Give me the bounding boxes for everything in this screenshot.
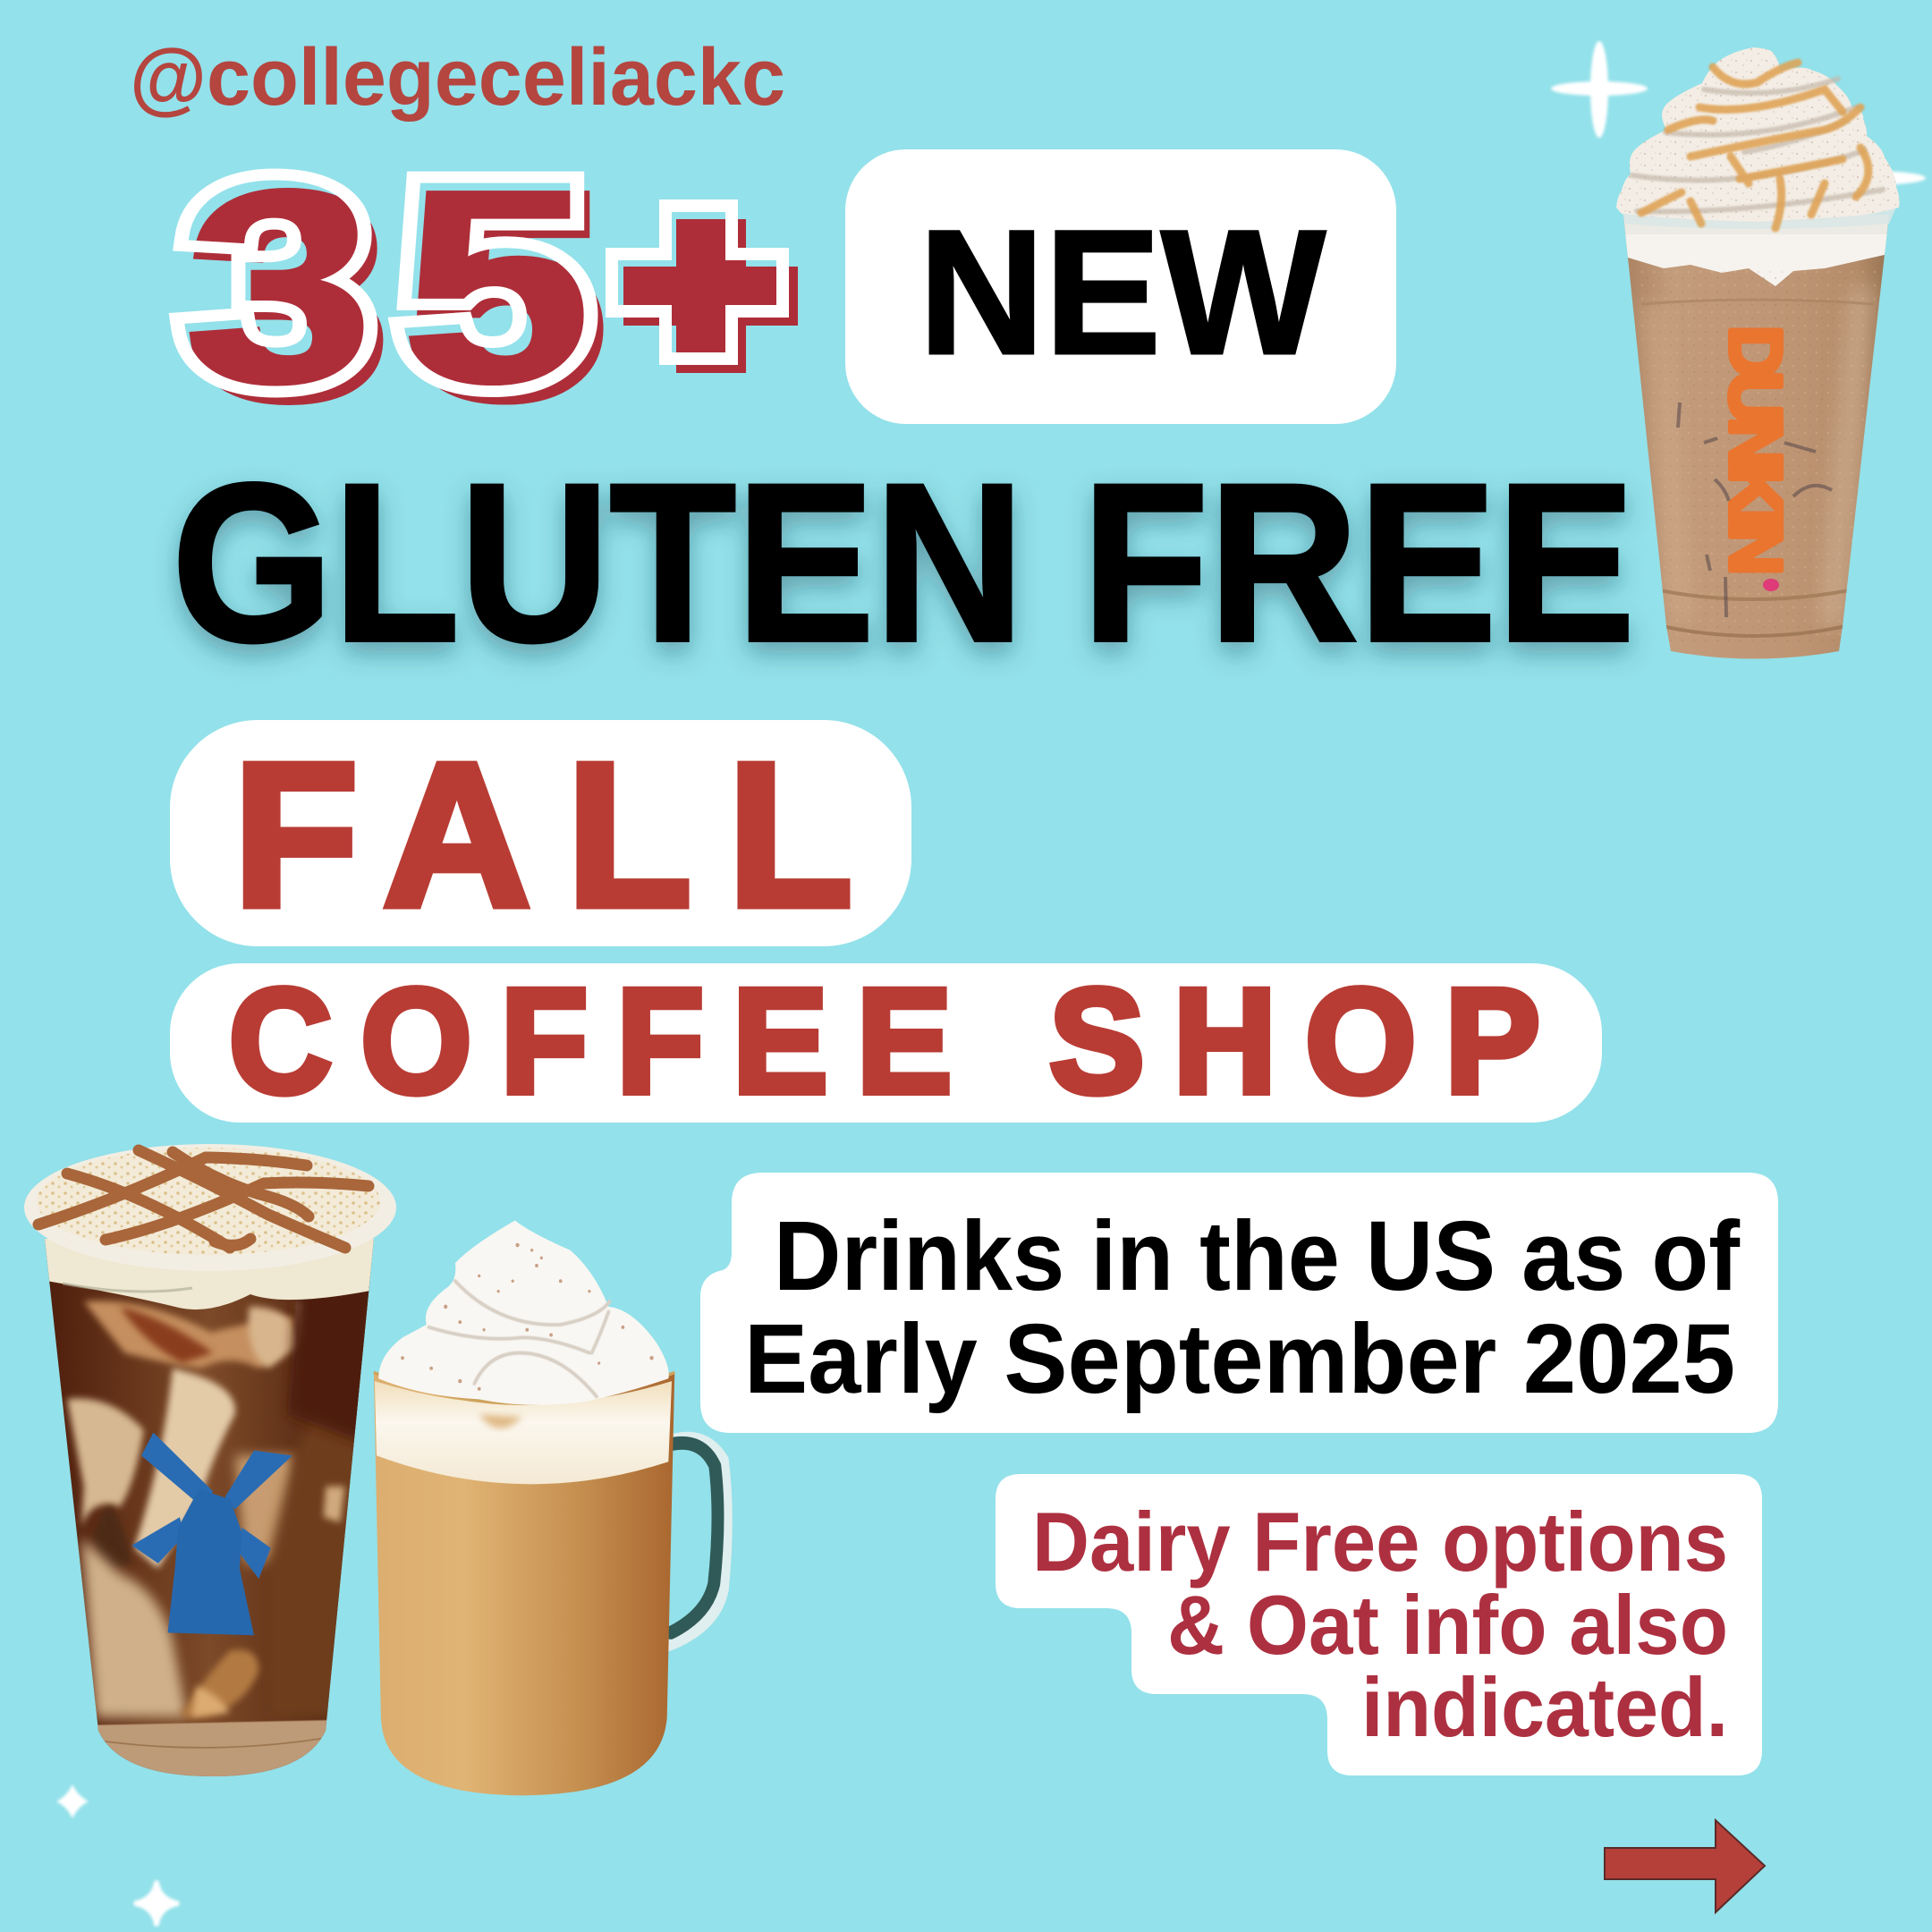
cup logo: windmill xyxy=(131,1433,292,1635)
pill: COFFEE SHOP: COFFEE SHOP xyxy=(229,959,1540,1124)
cup logo: DUNKIN xyxy=(1715,326,1796,575)
mug handle xyxy=(668,1440,724,1643)
callout: date: Drinks in the US as of xyxy=(774,1201,1740,1311)
callout: date: Early September 2025 xyxy=(744,1304,1735,1414)
pill: NEW: NEW xyxy=(919,193,1326,391)
heading: GLUTEN FREE: GLUTEN FREE xyxy=(172,437,1635,689)
mug body xyxy=(374,1372,674,1795)
whipped cream xyxy=(378,1220,669,1405)
big number 35+ xyxy=(134,134,798,452)
cup body xyxy=(1623,215,1889,658)
drink: Dunkin iced latte xyxy=(1610,47,1905,658)
whipped cream xyxy=(1616,47,1900,228)
callout: dairy free: indicated. xyxy=(1361,1660,1728,1754)
callout: dairy free xyxy=(996,1474,1762,1775)
callout: date xyxy=(700,1173,1778,1433)
big number 35+: 3 xyxy=(194,140,384,452)
callout: dairy free: & Oat info also xyxy=(1167,1578,1728,1672)
pill: FALL: FALL xyxy=(233,722,852,949)
handle text: @collegeceliackc xyxy=(130,33,785,123)
big number 35+: 5 xyxy=(411,140,601,452)
callout: dairy free: Dairy Free options xyxy=(1032,1495,1728,1589)
drink: Dutch Bros iced coffee xyxy=(24,1144,396,1794)
pill: NEW xyxy=(845,149,1396,424)
drink: latte mug xyxy=(374,1220,724,1795)
cup body xyxy=(45,1239,374,1776)
arrow xyxy=(1605,1820,1765,1912)
lid with foam xyxy=(24,1144,396,1271)
